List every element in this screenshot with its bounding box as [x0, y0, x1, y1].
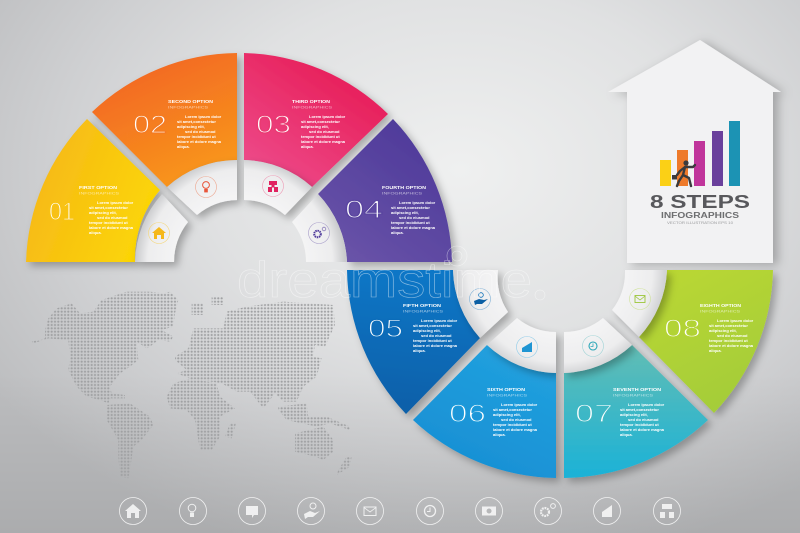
body text: Lorem ipsum dolor: [421, 318, 458, 323]
inner tab: step 4: [292, 194, 347, 262]
body text: aliqua.: [493, 432, 506, 437]
icon: gears: [534, 498, 562, 524]
icon: home: [120, 498, 146, 524]
body text: tempor incididunt ut: [177, 134, 216, 139]
body text: labore et dolore magna: [89, 225, 134, 230]
number 04: 04: [345, 196, 383, 224]
body text: tempor incididunt ut: [620, 422, 659, 427]
segment: pink: [244, 53, 388, 187]
body text: adipiscing elit,: [177, 124, 205, 129]
title: third option: THIRD OPTION: [292, 99, 331, 104]
number 07: 07: [575, 400, 613, 428]
segment: orange: [92, 53, 237, 187]
icon: clock: [416, 498, 444, 524]
body text: Lorem ipsum dolor: [501, 402, 538, 407]
title: eighth option: EIGHTH OPTION: [700, 303, 742, 308]
title: fourth option: FOURTH OPTION: [382, 185, 427, 190]
panel: house arrow: [608, 40, 781, 263]
body text: labore et dolore magna: [493, 427, 538, 432]
icon: home: [148, 222, 170, 244]
body text: aliqua.: [391, 230, 404, 235]
bar chart: growth bars: [660, 121, 740, 186]
body text: adipiscing elit,: [620, 412, 648, 417]
dotted world map: [30, 287, 357, 483]
body text: Lorem ipsum dolor: [185, 114, 222, 119]
body text: tempor incididunt ut: [301, 134, 340, 139]
icon: hand with coin: [298, 498, 324, 524]
body text: sit amet,consectetur: [177, 119, 216, 124]
body text: aliqua.: [89, 230, 102, 235]
body text: sit amet,consectetur: [413, 323, 452, 328]
body text: sit amet,consectetur: [391, 205, 430, 210]
subtitle: INFOGRAPHICS: [613, 394, 654, 398]
icon: chat bubble: [238, 498, 266, 524]
segment: green: [639, 270, 773, 413]
body text: sed do eiusmod: [421, 333, 452, 338]
body text: sit amet,consectetur: [301, 119, 340, 124]
caption: vector illustration: VECTOR ILLUSTRATION EPS 10: [667, 221, 733, 225]
body text: Lorem ipsum dolor: [628, 402, 665, 407]
title: second option: SECOND OPTION: [168, 99, 214, 104]
subtitle: INFOGRAPHICS: [487, 394, 528, 398]
panel: step 7: [564, 318, 708, 478]
body text: sed do eiusmod: [185, 129, 216, 134]
body text: aliqua.: [301, 144, 314, 149]
number 08: 08: [664, 315, 701, 343]
body text: labore et dolore magna: [177, 139, 222, 144]
body text: adipiscing elit,: [493, 412, 521, 417]
icon: network: [262, 176, 284, 196]
subtitle: INFOGRAPHICS: [292, 106, 333, 110]
body text: sed do eiusmod: [717, 333, 748, 338]
panel: step 6: [413, 318, 556, 478]
subtitle: INFOGRAPHICS: [403, 310, 444, 314]
subtitle: INFOGRAPHICS: [700, 310, 741, 314]
body text: sit amet,consectetur: [709, 323, 748, 328]
icon: hand with coin: [470, 288, 490, 310]
body text: tempor incididunt ut: [709, 338, 748, 343]
body text: Lorem ipsum dolor: [399, 200, 436, 205]
title: first option: FIRST OPTION: [79, 185, 118, 190]
body text: labore et dolore magna: [413, 343, 458, 348]
title: sixth option: SIXTH OPTION: [487, 387, 526, 392]
body text: tempor incididunt ut: [89, 220, 128, 225]
number 06: 06: [449, 400, 486, 428]
body text: Lorem ipsum dolor: [309, 114, 346, 119]
inner tab: step 5: [453, 270, 508, 338]
icon: banknote: [476, 498, 502, 524]
panel: step 8: [612, 270, 773, 413]
inner tab: step 8: [612, 270, 667, 337]
number 02: 02: [133, 111, 167, 139]
body text: labore et dolore magna: [620, 427, 665, 432]
segment: yellow: [26, 119, 160, 262]
body text: aliqua.: [709, 348, 722, 353]
icon: bulb: [180, 498, 206, 524]
number 01: 01: [49, 198, 75, 226]
body text: aliqua.: [177, 144, 190, 149]
body text: labore et dolore magna: [709, 343, 754, 348]
icon: running businessman: [672, 160, 695, 186]
body text: adipiscing elit,: [709, 328, 737, 333]
subheading: infographics: INFOGRAPHICS: [661, 211, 740, 220]
subtitle: INFOGRAPHICS: [382, 192, 423, 196]
body text: sit amet,consectetur: [89, 205, 128, 210]
icon: light bulb: [196, 176, 216, 198]
body text: tempor incididunt ut: [391, 220, 430, 225]
body text: sed do eiusmod: [399, 215, 430, 220]
icon: clock: [582, 336, 604, 356]
subtitle: INFOGRAPHICS: [168, 106, 209, 110]
body text: adipiscing elit,: [413, 328, 441, 333]
body text: adipiscing elit,: [391, 210, 419, 215]
body text: sit amet,consectetur: [493, 407, 532, 412]
segment: teal: [564, 345, 708, 478]
icon row: [120, 498, 680, 524]
segment: light blue: [413, 345, 556, 478]
segment: dark blue: [347, 270, 480, 414]
icon: envelope: [356, 498, 384, 524]
body text: sed do eiusmod: [309, 129, 340, 134]
number 03: 03: [256, 111, 291, 139]
panel: step 4: [292, 119, 452, 262]
body text: labore et dolore magna: [391, 225, 436, 230]
icon: rising chart: [516, 336, 538, 358]
icon: envelope: [630, 288, 650, 310]
body text: aliqua.: [620, 432, 633, 437]
body text: Lorem ipsum dolor: [717, 318, 754, 323]
inner tab: step 2: [167, 160, 237, 215]
subtitle: INFOGRAPHICS: [79, 192, 120, 196]
inner tab: step 1: [135, 194, 188, 262]
icon: network: [654, 498, 680, 524]
body text: adipiscing elit,: [301, 124, 329, 129]
body text: sed do eiusmod: [97, 215, 128, 220]
body text: tempor incididunt ut: [493, 422, 532, 427]
panel: step 2: [92, 53, 237, 215]
number 05: 05: [368, 315, 403, 343]
watermark: dreamstime: [237, 252, 532, 308]
body text: adipiscing elit,: [89, 210, 117, 215]
body text: sit amet,consectetur: [620, 407, 659, 412]
panel: step 1: [26, 119, 188, 262]
panel: step 3: [244, 53, 388, 215]
body text: Lorem ipsum dolor: [97, 200, 134, 205]
title: fifth option: FIFTH OPTION: [403, 303, 442, 308]
icon: rising bars: [594, 498, 620, 524]
body text: labore et dolore magna: [301, 139, 346, 144]
inner tab: step 6: [487, 318, 556, 373]
body text: aliqua.: [413, 348, 426, 353]
segment: purple: [318, 119, 452, 262]
body text: sed do eiusmod: [501, 417, 532, 422]
panel: step 5: [347, 270, 508, 414]
inner tab: step 3: [244, 160, 312, 215]
icon: gears: [308, 222, 330, 244]
title: seventh option: SEVENTH OPTION: [613, 387, 662, 392]
body text: sed do eiusmod: [628, 417, 659, 422]
inner tab: step 7: [564, 318, 632, 373]
body text: tempor incididunt ut: [413, 338, 452, 343]
heading: 8 steps: 8 STEPS: [650, 192, 750, 212]
